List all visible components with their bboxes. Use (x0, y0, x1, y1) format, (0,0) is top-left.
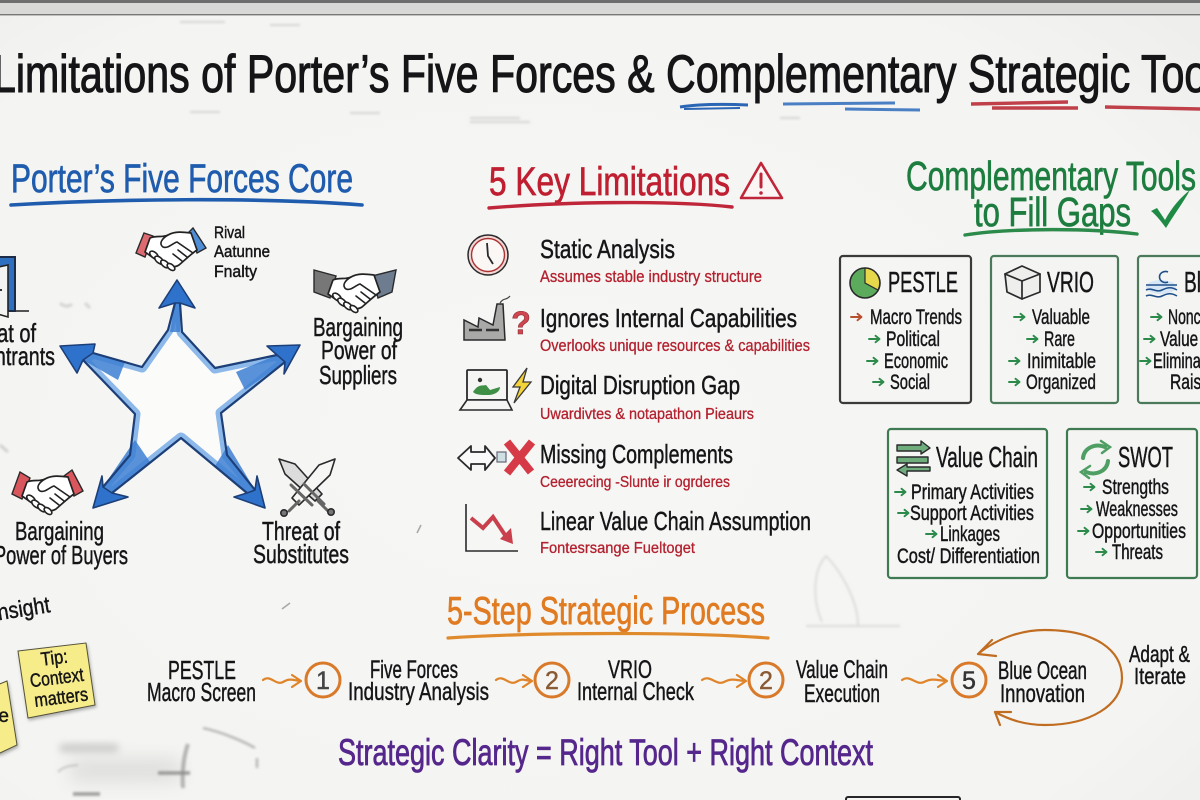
icon: supplier handshake (314, 270, 396, 314)
card: VRIO: VRIO (1047, 267, 1094, 299)
step: Five Forces (348, 656, 489, 706)
card: Value Chain: Primary Activities (911, 481, 1034, 504)
panel: complementary tools (840, 153, 1200, 578)
limitation 4: missing complements: Ceeerecing -Slunte ir ogrderes (540, 474, 730, 491)
sticky note: tip: Context (29, 665, 85, 692)
limitation 1: static analysis: Assumes stable industry structure (540, 267, 762, 286)
limitation 1: static analysis (468, 234, 762, 286)
step: Value Chain: Execution (804, 680, 880, 708)
arrow: step 1 (263, 675, 301, 687)
badge: 2 (third) (749, 663, 783, 697)
limitation 1: static analysis: Static Analysis (540, 234, 675, 264)
icon: pie clock (850, 268, 880, 298)
label: bargaining power of suppliers: Bargaining (313, 312, 403, 342)
limitation 3: digital disruption gap (460, 368, 754, 423)
icon: cycle arrows (1081, 441, 1110, 478)
sticky note: tip: matters (33, 684, 89, 712)
label: threat of new entrants (0, 318, 55, 371)
label: rivalry: Rival (214, 223, 245, 242)
badge: 1 (306, 663, 340, 697)
card: PESTLE: Economic (884, 350, 948, 373)
card: Blue Ocean (1138, 256, 1200, 403)
icon: falling chart (466, 504, 518, 551)
badge: 5: 5 (962, 667, 976, 695)
step: Five Forces: Five Forces (370, 656, 458, 684)
label: threat of substitutes: Threat of (262, 516, 341, 546)
label: threat of substitutes (253, 516, 349, 569)
arrow: step 2 (496, 675, 532, 687)
heading: 5-Step Strategic Process: 5-Step Strategic Process (447, 590, 765, 633)
badge: 1: 1 (316, 667, 330, 695)
icon: buyer handshake (12, 470, 83, 516)
step: VRIO: Internal Check (577, 678, 694, 706)
icon: rival handshake (136, 228, 206, 272)
limitation 5: linear value chain assumption: Linear Value Chain Assumption (540, 506, 811, 536)
panel: 5 key limitations (458, 160, 811, 557)
card: VRIO: Rare (1044, 328, 1075, 351)
sticky note: tip (18, 643, 95, 718)
limitation 2: ignores internal capabilities (464, 296, 810, 355)
icon: factory and question mark: ? (511, 305, 531, 341)
label: Adapt & Iterate: Iterate (1134, 663, 1186, 689)
arrow: step 4 (902, 675, 947, 687)
label: rivalry: Aatunne (214, 242, 270, 261)
sticky note: partial (0, 681, 17, 753)
badge: 5 (952, 663, 986, 697)
card: PESTLE (840, 256, 971, 403)
card: PESTLE: Social (890, 371, 930, 394)
label: rivalry (214, 223, 270, 281)
step: VRIO (577, 656, 694, 706)
card: VRIO (991, 256, 1118, 403)
card: SWOT: Strengths (1102, 476, 1169, 499)
step: Five Forces: Industry Analysis (348, 678, 489, 706)
limitation 3: digital disruption gap: Uwardivtes & notapathon Pieaurs (540, 406, 754, 423)
limitation 4: missing complements (458, 439, 733, 491)
panel: key insight notes (0, 591, 95, 753)
limitation 3: digital disruption gap: Digital Disruption Gap (540, 370, 740, 400)
step: Value Chain: Value Chain (796, 656, 888, 684)
label: bargaining power of suppliers: Suppliers (319, 360, 397, 390)
heading: Complementary Tools to Fill Gaps (906, 153, 1196, 235)
limitation 2: ignores internal capabilities: Ignores Internal Capabilities (540, 303, 797, 333)
limitation 2: ignores internal capabilities: Overlooks unique resources & capabilities (540, 336, 810, 355)
arrow: step 3 (702, 675, 746, 687)
label: threat of substitutes: Substitutes (253, 539, 349, 569)
label: rivalry: Fnalty (214, 262, 257, 281)
icon: warning triangle (741, 163, 782, 198)
icon: door for new entrants (0, 257, 29, 317)
arrow: iterate loop (978, 630, 1122, 725)
conclusion: Strategic Clarity = Right Tool + Right Context (338, 732, 874, 773)
icon: cube (1005, 266, 1040, 299)
heading: 5 Key Limitations: 5 Key Limitations (489, 160, 730, 204)
step: PESTLE (147, 655, 256, 707)
card: SWOT (1067, 429, 1197, 578)
icon: arrows and red cross (458, 442, 532, 473)
step: Blue Ocean: Blue Ocean (998, 657, 1087, 685)
card: SWOT: Threats (1112, 541, 1163, 564)
icon: opposing arrows (897, 441, 930, 476)
top board frame (0, 0, 1200, 15)
icon: waves (1146, 272, 1177, 297)
marker tray object (846, 797, 960, 800)
heading: 5-Step Strategic Process (447, 590, 768, 638)
label: bargaining power of suppliers: Power of (321, 335, 398, 365)
badge: 2: 2 (545, 667, 559, 695)
step: VRIO: VRIO (608, 656, 652, 684)
icon: laptop and lightning (460, 368, 531, 410)
icon: crossed swords (279, 459, 335, 516)
label: bargaining power of suppliers (313, 312, 403, 390)
card: PESTLE: PESTLE (888, 267, 958, 299)
label: bargaining power of buyers: Bargaining (15, 516, 104, 546)
step: Blue Ocean: Innovation (1000, 680, 1085, 708)
sticky note: tip: Tip: (40, 647, 69, 671)
card: VRIO: Organized (1026, 371, 1096, 394)
step: PESTLE: PESTLE (168, 655, 236, 685)
limitation 4: missing complements: Missing Complements (540, 439, 733, 469)
card: Value Chain: Support Activities (910, 502, 1034, 525)
icon: clock (468, 235, 508, 275)
card: PESTLE: Political (886, 328, 940, 351)
step: Value Chain (796, 656, 888, 708)
badge: 2 (third): 2 (759, 667, 773, 695)
badge: 2 (535, 663, 569, 697)
limitation 5: linear value chain assumption (466, 504, 811, 557)
five forces star with arrows (60, 280, 300, 508)
card: Value Chain: Cost/ Differentiation (897, 545, 1040, 568)
step: Blue Ocean (998, 657, 1087, 708)
card: Value Chain (888, 429, 1047, 578)
panel: Porter's five forces core (0, 157, 403, 570)
label: Adapt & Iterate (1129, 641, 1190, 689)
label: bargaining power of buyers (0, 516, 128, 570)
heading: Porter's Five Forces Core: Porter’s Five Forces Core (11, 157, 353, 201)
card: PESTLE: Macro Trends (870, 306, 962, 329)
card: Value Chain: Linkages (940, 523, 1000, 546)
panel: 5-step strategic process (147, 590, 1190, 725)
card: Value Chain: Value Chain (936, 442, 1038, 474)
icon: green check (1151, 190, 1190, 228)
card: VRIO: Inimitable (1027, 350, 1096, 373)
limitation 5: linear value chain assumption: Fontesrsange Fueltoget (540, 540, 696, 557)
heading: Complementary Tools to Fill Gaps: to Fill Gaps (974, 189, 1131, 235)
step: PESTLE: Macro Screen (147, 677, 256, 707)
icon: factory and question mark (464, 296, 531, 341)
card: VRIO: Valuable (1032, 306, 1090, 329)
